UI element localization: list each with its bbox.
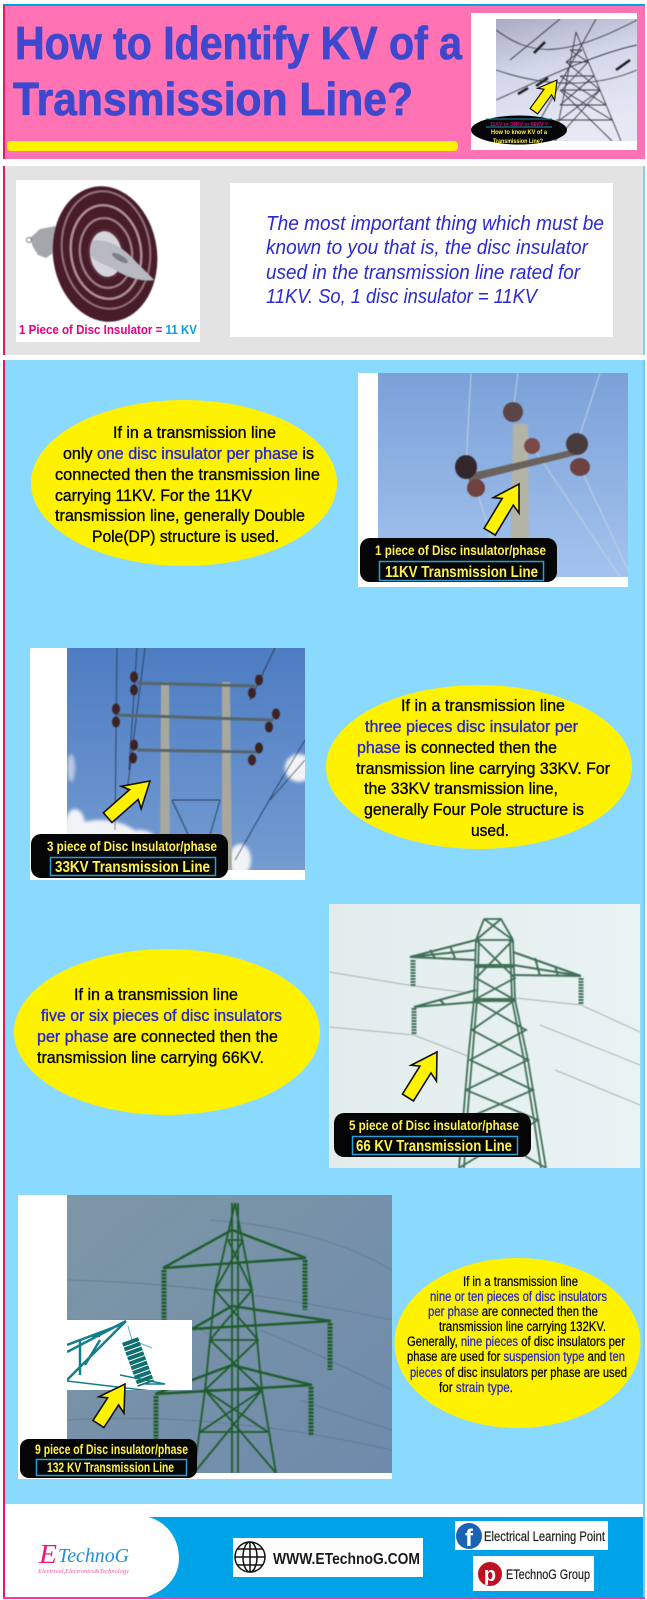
callout: 66KV xyxy=(14,949,320,1115)
callout: 11KV: Pole(DP) structure is used. xyxy=(92,527,279,546)
label: 132KV: 9 piece of Disc insulator/phase xyxy=(35,1441,188,1457)
logo: ETechnoG: TechnoG xyxy=(58,1545,130,1567)
title: Transmission Line? xyxy=(13,73,413,125)
photo: 66KV tower xyxy=(329,904,640,1168)
logo: ETechnoG xyxy=(37,1539,130,1575)
arrow xyxy=(86,1376,138,1432)
callout: 66KV: per phase are connected then the xyxy=(37,1027,278,1046)
panel: header xyxy=(3,4,645,159)
callout: 33KV: generally Four Pole structure is xyxy=(364,800,584,819)
arrow xyxy=(477,476,532,540)
label: 66KV: 66 KV Transmission Line xyxy=(356,1138,512,1155)
callout: 132KV: nine or ten pieces of disc insulators xyxy=(430,1289,607,1304)
callout: 11KV: transmission line, generally Double xyxy=(55,506,305,525)
callout: 33KV: the 33KV transmission line, xyxy=(364,779,558,798)
insulator image card xyxy=(16,179,200,342)
pinterest box xyxy=(473,1556,594,1591)
label: 11KV xyxy=(360,538,557,582)
label: 11KV: 11KV Transmission Line xyxy=(385,564,538,581)
icon: facebook xyxy=(456,1523,482,1552)
callout: 132KV: per phase are connected then the xyxy=(428,1304,598,1319)
website box xyxy=(233,1538,423,1577)
callout: 11KV: connected then the transmission line xyxy=(55,465,320,484)
label: 66KV xyxy=(334,1113,531,1157)
title xyxy=(13,17,462,125)
logo: ETechnoG: E xyxy=(38,1539,58,1569)
callout: 33KV: transmission line carrying 33KV. For xyxy=(356,759,610,778)
label: 33KV xyxy=(31,834,228,878)
logo: ETechnoG: Electrical,Electronics&Technology xyxy=(37,1568,129,1575)
panel: footer xyxy=(3,1504,645,1599)
arrow xyxy=(98,770,160,829)
callout: 33KV: used. xyxy=(471,821,509,840)
icon: globe xyxy=(235,1542,265,1572)
callout: 11KV: If in a transmission line xyxy=(113,423,276,442)
label: 11KV: 1 piece of Disc insulator/phase xyxy=(375,542,546,558)
intro text block xyxy=(230,183,613,337)
facebook box: Electrical Learning Point xyxy=(484,1529,605,1544)
callout: 132KV: Generally, nine pieces of disc insulators per xyxy=(407,1334,625,1349)
label: 132KV: 132 KV Transmission Line xyxy=(47,1459,174,1475)
callout: 11KV: only one disc insulator per phase is xyxy=(63,444,314,463)
black ellipse badge: 11KV or 33KV or 66KV ? xyxy=(490,122,549,128)
icon: facebook: f xyxy=(465,1525,474,1552)
callout: 11KV: carrying 11KV. For the 11KV xyxy=(55,486,253,505)
label: 33KV: 33KV Transmission Line xyxy=(55,859,210,876)
callout: 11KV xyxy=(31,400,337,566)
intro text block: used in the transmission line rated for xyxy=(266,262,581,284)
intro text block: known to you that is, the disc insulator xyxy=(266,237,589,259)
callout: 33KV: phase is connected then the xyxy=(357,738,557,757)
callout: 132KV: phase are used for suspension type and ten xyxy=(407,1349,625,1364)
callout: 132KV: for strain type. xyxy=(439,1380,513,1395)
black ellipse badge: Transmission Line? xyxy=(493,139,543,145)
clouds xyxy=(67,750,305,870)
arrow xyxy=(525,74,565,117)
website box: WWW.ETechnoG.COM xyxy=(273,1551,420,1568)
callout: 66KV: If in a transmission line xyxy=(74,985,238,1004)
black ellipse badge xyxy=(471,116,567,145)
photo: 132KV tower xyxy=(18,1195,392,1479)
label: 33KV: 3 piece of Disc Insulator/phase xyxy=(47,838,217,854)
icon: disc insulator xyxy=(26,179,166,329)
photo: 33KV line xyxy=(30,648,313,880)
callout: 132KV: transmission line carrying 132KV. xyxy=(439,1319,606,1334)
header thumbnail photo xyxy=(471,13,637,150)
callout: 66KV: transmission line carrying 66KV. xyxy=(37,1048,264,1067)
label: 66KV: 5 piece of Disc insulator/phase xyxy=(349,1117,519,1133)
inset: insulator string close-up xyxy=(67,1320,192,1392)
callout: 132KV: If in a transmission line xyxy=(463,1274,578,1289)
intro text block: 11KV. So, 1 disc insulator = 11KV xyxy=(266,286,539,308)
facebook box xyxy=(455,1521,608,1552)
callout: 66KV: five or six pieces of disc insulators xyxy=(41,1006,282,1025)
panel: main blue area xyxy=(3,360,645,1504)
black ellipse badge: How to know KV of a xyxy=(491,130,548,136)
callout: 33KV: three pieces disc insulator per xyxy=(365,717,578,736)
callout: 33KV: If in a transmission line xyxy=(401,696,565,715)
title: How to Identify KV of a xyxy=(15,17,462,69)
panel: disc insulator intro xyxy=(3,166,645,355)
callout: 132KV xyxy=(394,1258,640,1428)
intro text block: The most important thing which must be xyxy=(266,213,604,235)
photo: 11KV line xyxy=(358,373,628,587)
label: 132KV xyxy=(20,1439,197,1478)
icon: pinterest: p xyxy=(484,1564,496,1586)
pinterest box: ETechnoG Group xyxy=(506,1567,590,1582)
insulator caption: 1 Piece of Disc Insulator = 11 KV xyxy=(19,322,197,337)
callout: 33KV xyxy=(326,685,632,849)
arrow xyxy=(396,1044,450,1106)
yellow underline xyxy=(7,141,458,151)
